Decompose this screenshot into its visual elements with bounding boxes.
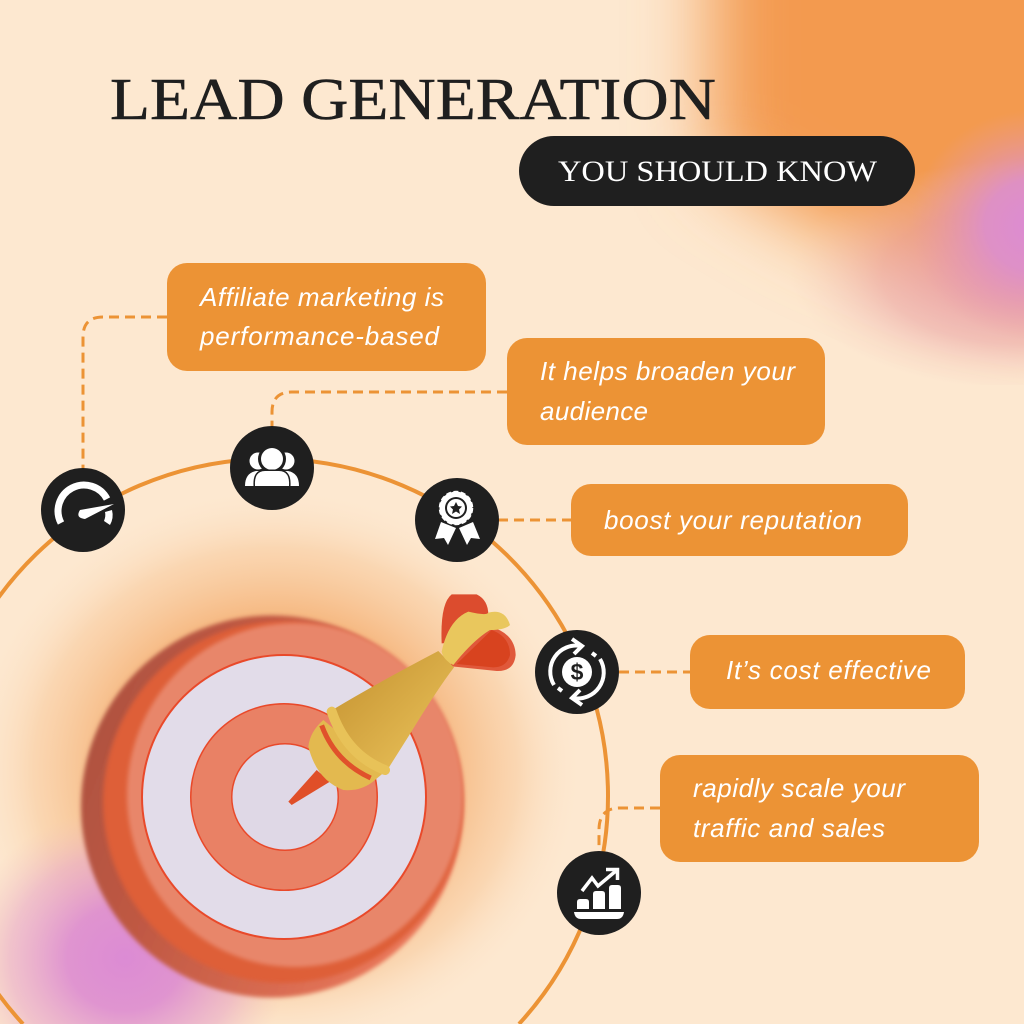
callout 4: It’s cost effective (726, 655, 931, 685)
callout 4 (690, 635, 965, 709)
icon: people (230, 426, 314, 510)
icon: growth chart (557, 851, 641, 935)
icon: award ribbon (415, 478, 499, 562)
connector 2 (272, 392, 507, 426)
background glow: behind target (0, 480, 590, 1024)
subtitle pill (519, 136, 915, 206)
target board (81, 616, 463, 998)
callout 1: performance-based (199, 321, 441, 351)
orbit ring (0, 459, 608, 1024)
callout 1: Affiliate marketing is (198, 282, 444, 312)
callout 2 (507, 338, 825, 445)
connector 4 (619, 670, 690, 674)
connector 3 (498, 518, 571, 522)
callout 5: rapidly scale your (693, 773, 906, 803)
callout 3 (571, 484, 908, 556)
background glow: top right (700, 0, 1024, 385)
callout 2: audience (540, 396, 648, 426)
subtitle pill: YOU SHOULD KNOW (558, 155, 878, 188)
callout 5 (660, 755, 979, 862)
callout 2: It helps broaden your (540, 356, 796, 386)
dart (288, 594, 516, 805)
callout 5: traffic and sales (693, 813, 885, 843)
connector 5 (599, 808, 660, 853)
title: LEAD GENERATION (110, 66, 716, 132)
icon: dollar cycle: $ (571, 659, 584, 685)
callout 1 (167, 263, 486, 371)
icon: speedometer (41, 468, 125, 552)
callout 3: boost your reputation (604, 505, 862, 535)
icon: dollar cycle (535, 630, 619, 714)
connector 1 (83, 317, 167, 468)
